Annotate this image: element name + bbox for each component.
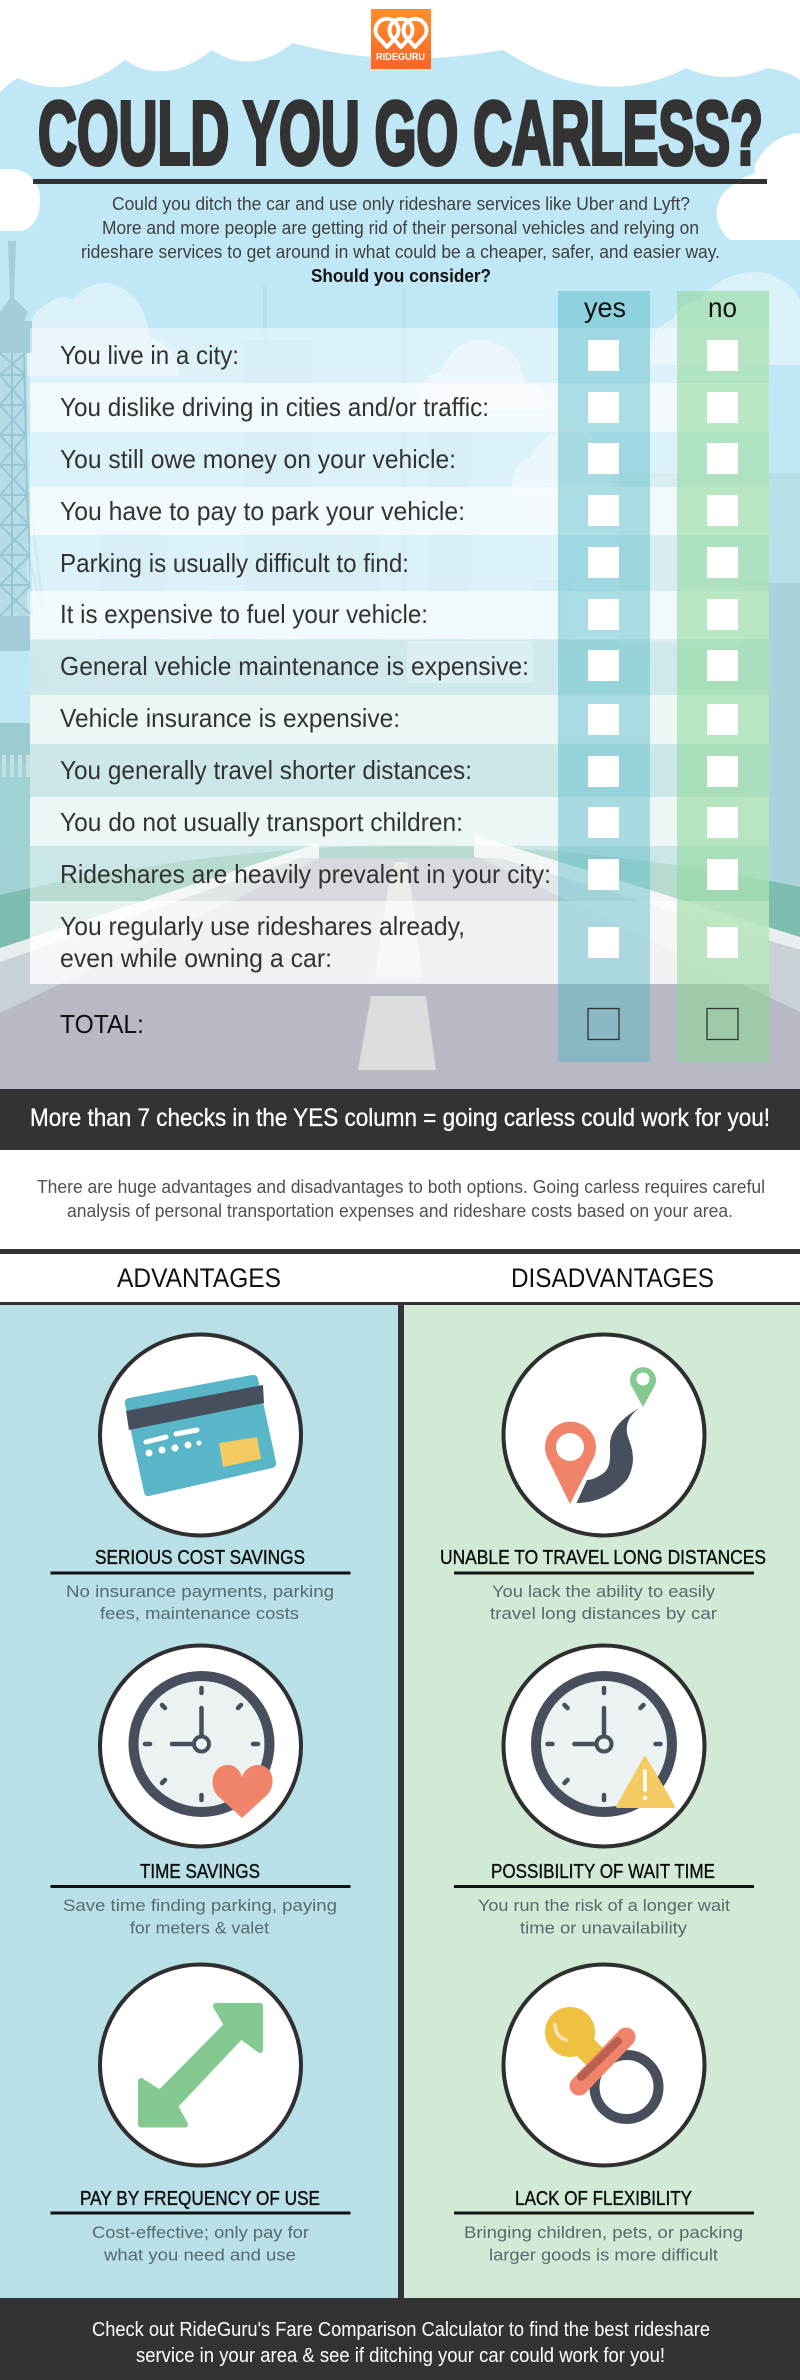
advantage: pay by frequency of use: what you need and use bbox=[103, 2246, 296, 2264]
disadvantage: possibility of wait time bbox=[454, 1646, 754, 1938]
intro text: More and more people are getting rid of their personal vehicles and relying on bbox=[102, 218, 699, 238]
advantage: pay by frequency of use: Cost-effective; only pay for bbox=[92, 2223, 309, 2242]
city background scene bbox=[0, 0, 800, 1089]
title rule bbox=[33, 179, 767, 184]
disadvantage: unable to travel long distances bbox=[440, 1334, 766, 1623]
disadvantage: lack of flexibility: larger goods is more difficult bbox=[489, 2246, 718, 2264]
advantage: time savings: for meters & valet bbox=[130, 1918, 269, 1938]
explanatory paragraph: analysis of personal transportation expenses and rideshare costs based on your area. bbox=[67, 1201, 733, 1221]
disadvantage: unable to travel long distances: travel long distances by car bbox=[490, 1604, 717, 1623]
advantage: time savings bbox=[50, 1646, 350, 1938]
section header strip bbox=[0, 1249, 800, 1305]
disadvantage: unable to travel long distances: You lack the ability to easily bbox=[492, 1582, 716, 1601]
advantage: serious cost savings: fees, maintenance costs bbox=[100, 1604, 299, 1623]
disadvantage: lack of flexibility bbox=[454, 1964, 754, 2264]
panel divider bbox=[398, 1305, 404, 2298]
icon: clock with heart bbox=[134, 1676, 273, 1818]
checklist statements: You still owe money on your vehicle: bbox=[60, 444, 456, 474]
checklist statements bbox=[60, 340, 551, 1039]
icon: eiffel tower bbox=[0, 241, 66, 790]
logo: rideguru bbox=[371, 9, 431, 69]
icon: credit card bbox=[125, 1375, 276, 1496]
checklist statements: You do not usually transport children: bbox=[60, 807, 463, 837]
explanatory paragraph bbox=[0, 1150, 800, 1249]
checklist statements: TOTAL: bbox=[60, 1009, 144, 1039]
panel: disadvantages bbox=[404, 1305, 800, 2298]
checklist statements: Vehicle insurance is expensive: bbox=[60, 703, 400, 733]
advantage: serious cost savings bbox=[50, 1334, 350, 1623]
checklist row bands bbox=[30, 328, 769, 984]
advantage: pay by frequency of use: PAY BY FREQUENCY OF USE bbox=[80, 2188, 320, 2210]
intro text: rideshare services to get around in what could be a cheaper, safer, and easier way. bbox=[81, 242, 720, 262]
advantage: serious cost savings: No insurance payments, parking bbox=[66, 1582, 334, 1601]
result banner bbox=[0, 1089, 800, 1150]
intro text: Should you consider? bbox=[311, 266, 491, 286]
disadvantage: possibility of wait time: time or unavailability bbox=[520, 1918, 688, 1938]
footer call to action: service in your area & see if ditching your car could work for you! bbox=[136, 2344, 665, 2367]
checklist statements: General vehicle maintenance is expensive: bbox=[60, 651, 529, 681]
checklist statements: Parking is usually difficult to find: bbox=[60, 548, 409, 578]
icon: pacifier bbox=[545, 2007, 658, 2119]
checklist statements: You regularly use rideshares already, bbox=[60, 911, 465, 941]
yes column bbox=[558, 291, 650, 1062]
checklist statements: You dislike driving in cities and/or traffic: bbox=[60, 392, 489, 422]
advantage: pay by frequency of use bbox=[50, 1964, 350, 2264]
yes checkboxes bbox=[588, 340, 619, 958]
checklist statements: You live in a city: bbox=[60, 340, 239, 370]
advantage: time savings: TIME SAVINGS bbox=[140, 1861, 260, 1883]
total boxes bbox=[588, 1008, 738, 1040]
icon: double arrow bbox=[141, 2006, 260, 2124]
checklist statements: You generally travel shorter distances: bbox=[60, 755, 472, 785]
checklist statements: It is expensive to fuel your vehicle: bbox=[60, 599, 428, 629]
icon: clock with warning bbox=[536, 1676, 674, 1812]
disadvantage: lack of flexibility: Bringing children, pets, or packing bbox=[464, 2223, 743, 2242]
checklist statements: Rideshares are heavily prevalent in your city: bbox=[60, 859, 551, 889]
section header strip: DISADVANTAGES bbox=[511, 1263, 714, 1293]
disadvantage: possibility of wait time: You run the risk of a longer wait bbox=[478, 1896, 730, 1915]
disadvantage: possibility of wait time: POSSIBILITY OF WAIT TIME bbox=[491, 1861, 715, 1883]
no column bbox=[677, 291, 769, 1062]
no heading: no bbox=[708, 292, 737, 323]
no checkboxes bbox=[707, 340, 738, 958]
advantage: time savings: Save time finding parking, paying bbox=[63, 1896, 337, 1915]
section header strip: ADVANTAGES bbox=[117, 1263, 281, 1293]
icon: route with map pins bbox=[545, 1367, 656, 1504]
checklist statements: You have to pay to park your vehicle: bbox=[60, 496, 465, 526]
intro text: Could you ditch the car and use only rideshare services like Uber and Lyft? bbox=[112, 194, 690, 214]
checklist statements: even while owning a car: bbox=[60, 943, 332, 973]
disadvantage: lack of flexibility: LACK OF FLEXIBILITY bbox=[515, 2188, 692, 2210]
footer call to action: Check out RideGuru's Fare Comparison Calculator to find the best rideshare bbox=[92, 2318, 710, 2341]
footer call to action bbox=[0, 2298, 800, 2380]
yes heading: yes bbox=[584, 292, 626, 323]
panel: advantages bbox=[0, 1305, 398, 2298]
advantage: serious cost savings: SERIOUS COST SAVINGS bbox=[95, 1547, 305, 1569]
intro text bbox=[81, 194, 720, 286]
logo: rideguru: RIDEGURU bbox=[376, 51, 425, 63]
explanatory paragraph: There are huge advantages and disadvantages to both options. Going carless requires careful bbox=[37, 1177, 765, 1197]
